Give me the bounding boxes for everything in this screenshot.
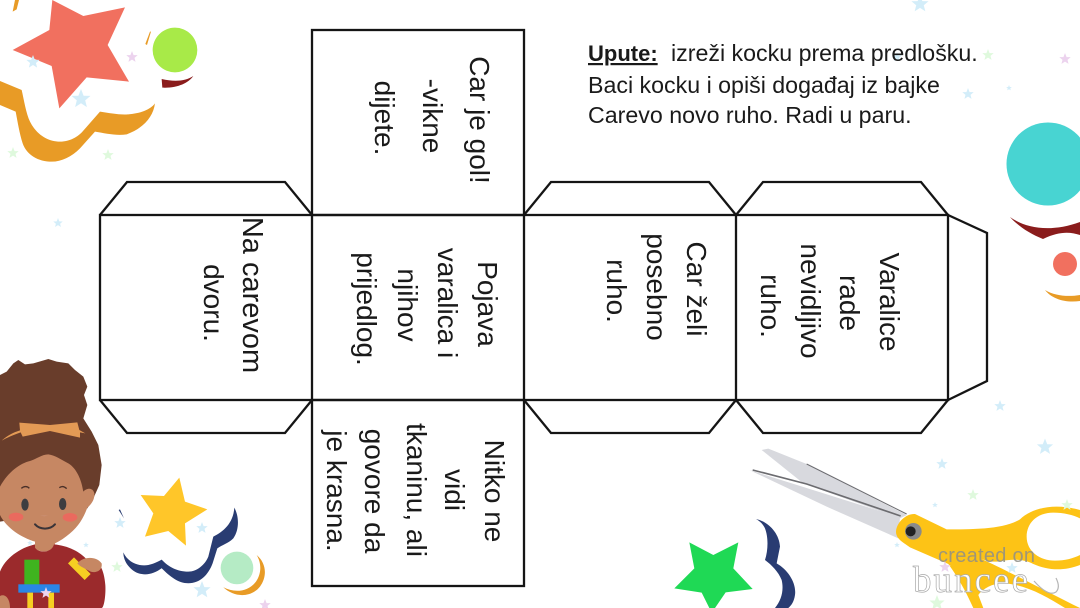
face text: Car je gol: [369, 56, 495, 184]
face text: Car je gol: dijete.: [369, 81, 400, 155]
face text: Nitko ne vidi tkaninu: [321, 423, 510, 557]
face text: Na carevom dvoru: [198, 217, 268, 373]
decoration: girl character: [0, 359, 105, 608]
face text: Nitko ne vidi tkaninu: Nitko ne: [479, 440, 510, 542]
face text: Pojava varalica: varalica i: [432, 248, 463, 358]
face text: Varalice rade nevidljivo ruho: ruho.: [755, 274, 786, 338]
face text: Varalice rade nevidljivo ruho: rade: [834, 275, 865, 331]
decoration: green star with navy cloud: [674, 519, 795, 608]
face text: Pojava varalica: prijedlog.: [351, 252, 382, 366]
decoration: yellow star with navy cloud: [119, 478, 265, 595]
watermark: created on buncee: [913, 545, 1058, 601]
watermark: created on buncee: buncee: [913, 560, 1028, 601]
face text: Car želi posebno ruho: Car želi: [681, 242, 712, 336]
illustration: scissors: [749, 449, 1080, 608]
face text: Car želi posebno ruho: ruho.: [601, 259, 632, 323]
face text: Car želi posebno ruho: posebno: [641, 233, 672, 341]
face text: Car je gol: -vikne: [417, 79, 448, 153]
face text: Car je gol: Car je gol!: [464, 56, 495, 184]
face text: Nitko ne vidi tkaninu: tkaninu, ali: [401, 423, 432, 557]
face text: Na carevom dvoru: Na carevom: [236, 217, 268, 373]
face text: Nitko ne vidi tkaninu: je krasna.: [321, 429, 352, 552]
face text: Varalice rade nevidljivo ruho: nevidljivo: [795, 243, 826, 359]
instructions text block: [588, 40, 978, 128]
face text: Pojava varalica: Pojava: [472, 261, 503, 347]
face text: Varalice rade nevidljivo ruho: Varalice: [874, 252, 905, 352]
instructions text block: Carevo novo ruho. Radi u paru.: [588, 102, 912, 128]
face text: Pojava varalica: [351, 248, 503, 366]
middle row faces: [100, 215, 948, 400]
face text: Varalice rade nevidljivo ruho: [755, 243, 905, 359]
instructions text block: Baci kocku i opiši događaj iz bajke: [588, 72, 940, 98]
decoration: right circles: [1006, 122, 1080, 302]
face text: Na carevom dvoru: dvoru.: [198, 264, 229, 342]
face text: Pojava varalica: njihov: [392, 268, 423, 342]
instructions text block: izreži kocku prema predlošku.: [671, 40, 978, 66]
face text: Nitko ne vidi tkaninu: vidi: [439, 469, 470, 511]
cube net outline: [100, 30, 987, 586]
face text: Nitko ne vidi tkaninu: govore da: [359, 429, 390, 554]
bottom face: [312, 400, 524, 586]
face text: Car želi posebno ruho: [601, 233, 712, 341]
top face: [312, 30, 524, 215]
watermark: created on buncee: created on: [938, 545, 1035, 567]
glue flaps: [100, 182, 987, 433]
instructions text block: Upute:: [588, 41, 658, 66]
decoration: top-left star cluster: [0, 0, 197, 162]
